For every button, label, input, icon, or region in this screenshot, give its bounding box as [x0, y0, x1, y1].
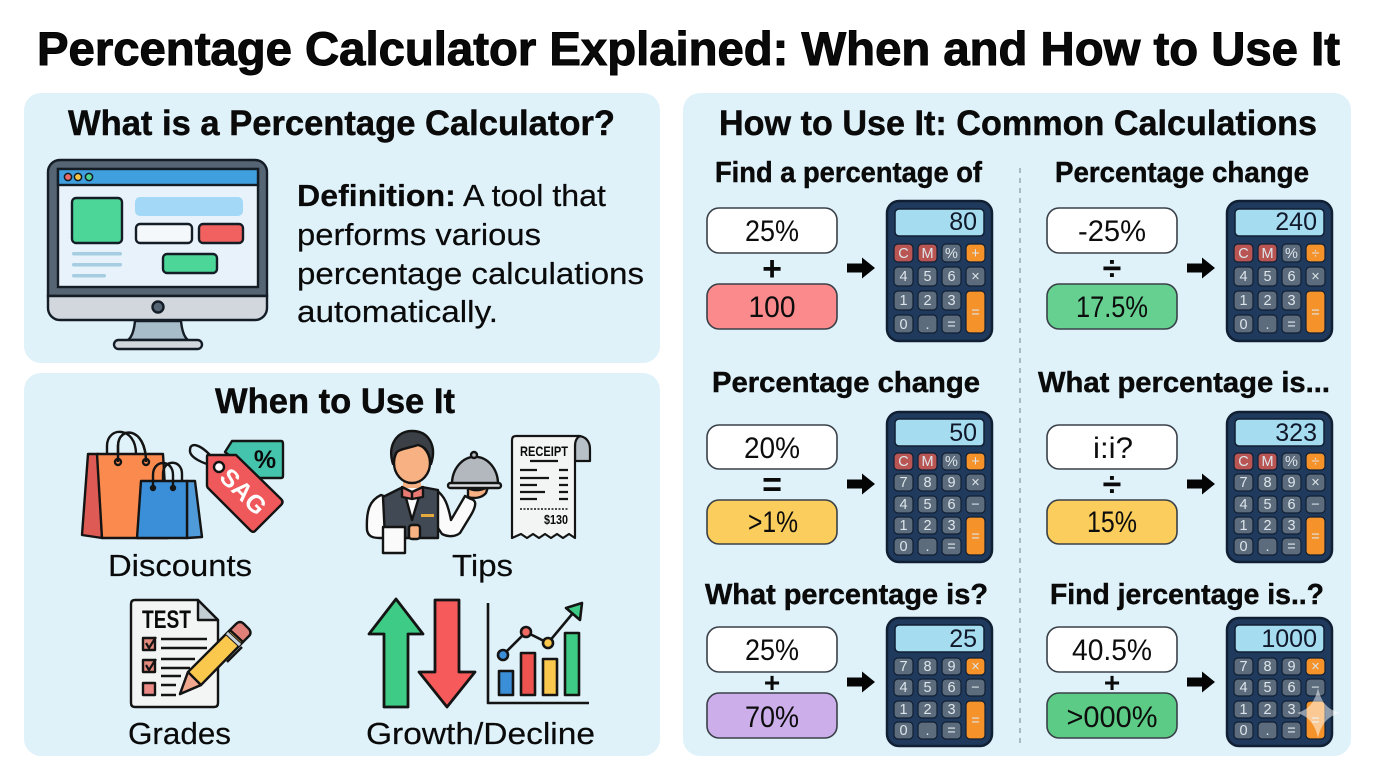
example: find percentage bottom: 1000 [1261, 625, 1317, 653]
example: what percentage is middle: i:i? [1093, 432, 1133, 465]
example: find a percentage of: = [971, 305, 980, 321]
example: what percentage is bottom: 25 [949, 625, 977, 653]
panel: when to use it [24, 373, 660, 756]
example: find a percentage of: CM%+ [898, 246, 980, 262]
icon: desktop monitor [48, 160, 267, 349]
example: what percentage is bottom: 0.= [899, 723, 956, 739]
example: what percentage is bottom: = [971, 713, 980, 729]
heading: what is: What is a Percentage Calculator? [68, 104, 615, 143]
example: find percentage bottom: 0.= [1239, 723, 1296, 739]
example: what percentage is middle: 789× [1239, 475, 1320, 491]
example: percentage change top: 0.= [1239, 317, 1296, 333]
example: percentage change top: 456× [1239, 269, 1320, 285]
example: what percentage is bottom: 789× [899, 659, 980, 675]
example: percentage change middle: 456− [899, 497, 980, 513]
example: what percentage is middle: 456− [1239, 497, 1320, 513]
icon: sparkle watermark [1297, 688, 1340, 738]
example: percentage change top: 123 [1239, 293, 1296, 309]
example: find percentage bottom: + [1104, 667, 1120, 698]
definition text: Definition: A tool that [297, 178, 606, 213]
example: percentage change middle: Percentage change [712, 367, 980, 399]
example: find a percentage of: Find a percentage of [715, 157, 982, 189]
receipt heading: RECEIPT [520, 443, 568, 459]
label: discounts: Discounts [108, 548, 252, 583]
example: find percentage bottom: 789× [1239, 659, 1320, 675]
example: find a percentage of: 80 [949, 208, 977, 236]
definition text: performs various [297, 217, 541, 252]
example: find a percentage of: 456× [899, 269, 980, 285]
example: find a percentage of: 123 [899, 293, 956, 309]
example: percentage change top: CM%÷ [1238, 246, 1320, 262]
example: what percentage is middle: 123 [1239, 518, 1296, 534]
example: find a percentage of: 100 [748, 291, 796, 324]
example: find percentage bottom: 123 [1239, 702, 1296, 718]
example: what percentage is middle: What percentage is... [1038, 367, 1330, 399]
icon: test paper and pencil [131, 600, 250, 707]
definition text: automatically. [297, 294, 498, 329]
heading: how to use it: How to Use It: Common Calculations [719, 104, 1317, 143]
receipt total: $130 [544, 513, 568, 527]
example: percentage change middle: = [762, 466, 782, 504]
icon: shopping bags and sale tag [82, 432, 283, 538]
panel: what is a percentage calculator [24, 93, 660, 363]
example: find percentage bottom: 40.5% [1072, 634, 1152, 667]
example: percentage change top: 17.5% [1076, 291, 1148, 324]
example: find percentage bottom: 456− [1239, 680, 1320, 696]
example: what percentage is middle: = [1311, 529, 1320, 545]
example: what percentage is bottom: 25% [745, 634, 799, 667]
example: find a percentage of: 25% [745, 215, 799, 248]
example: what percentage is middle: ÷ [1103, 466, 1121, 504]
example: what percentage is middle: CM%÷ [1238, 454, 1320, 470]
example: percentage change top: 240 [1275, 208, 1317, 236]
icon: waiter with cloche [367, 431, 501, 553]
panel: how to use it [683, 93, 1351, 756]
example: what percentage is bottom: 123 [899, 702, 956, 718]
test heading: TEST [142, 606, 191, 634]
title: Percentage Calculator Explained: When and How to Use It [37, 22, 1340, 75]
definition text: percentage calculations [297, 256, 644, 291]
label: grades: Grades [128, 716, 231, 751]
example: what percentage is middle: 323 [1275, 419, 1317, 447]
example: find a percentage of: + [762, 250, 782, 288]
example: percentage change middle: >1% [748, 506, 798, 539]
example: what percentage is bottom: 70% [745, 701, 799, 734]
label: growth/decline: Growth/Decline [366, 716, 595, 751]
example: percentage change middle: = [971, 529, 980, 545]
example: percentage change middle [707, 367, 992, 562]
example: percentage change middle: 20% [744, 432, 800, 465]
definition text [297, 178, 644, 329]
example: percentage change top [1047, 157, 1332, 341]
tag percent sign: % [254, 446, 276, 474]
example: percentage change top: = [1311, 305, 1320, 321]
example: what percentage is bottom [705, 579, 992, 746]
example: percentage change top: ÷ [1103, 250, 1121, 288]
example: find percentage bottom: = [1311, 713, 1320, 729]
example: what percentage is middle: 15% [1087, 506, 1137, 539]
example: what percentage is middle: 0.= [1239, 539, 1296, 555]
example: what percentage is middle [1038, 367, 1332, 562]
example: find a percentage of [707, 157, 992, 341]
label: tips: Tips [452, 548, 513, 583]
example: percentage change middle: 0.= [899, 539, 956, 555]
sale tag label: SAG [214, 463, 272, 521]
icon: growth and decline arrows [369, 599, 475, 707]
example: percentage change top: -25% [1078, 215, 1146, 248]
example: percentage change top: Percentage change [1055, 157, 1309, 189]
icon: receipt [512, 436, 590, 538]
example: what percentage is bottom: + [764, 667, 780, 698]
example: percentage change middle: 123 [899, 518, 956, 534]
example: percentage change middle: CM%+ [898, 454, 980, 470]
example: find percentage bottom: >000% [1066, 701, 1158, 734]
example: find a percentage of: 0.= [899, 317, 956, 333]
icon: bar and line chart [488, 603, 589, 703]
example: percentage change middle: 789× [899, 475, 980, 491]
example: percentage change middle: 50 [949, 419, 977, 447]
example: find percentage bottom [1047, 579, 1332, 746]
example: what percentage is bottom: What percentage is? [705, 579, 988, 611]
example: find percentage bottom: Find jercentage is..? [1050, 579, 1324, 611]
heading: when to use it: When to Use It [215, 382, 455, 421]
example: what percentage is bottom: 456− [899, 680, 980, 696]
